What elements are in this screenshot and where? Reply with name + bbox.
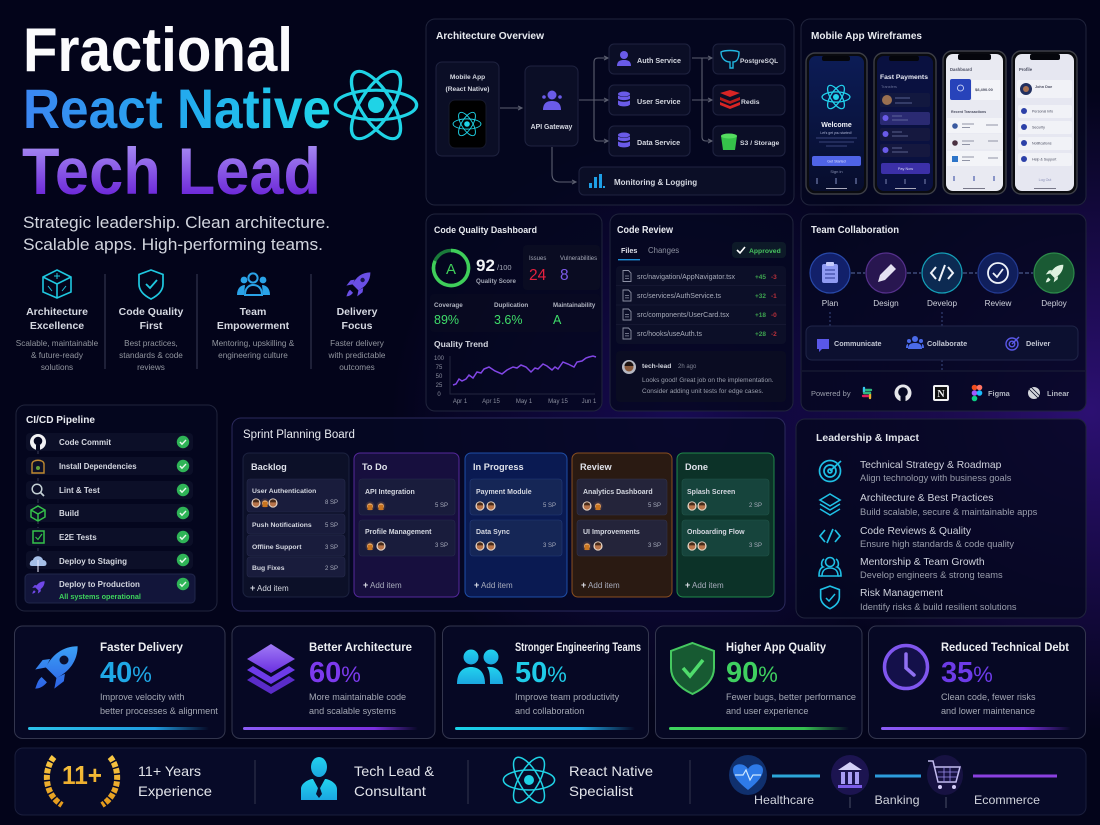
heading: code review: Code Review	[617, 225, 674, 236]
review comment: tech-lead	[642, 363, 671, 370]
pillar: team empowerment: engineering culture	[218, 351, 288, 360]
changed files list: src/navigation/AppNavigator.tsx	[637, 274, 736, 281]
column: in progress: Data Sync	[476, 529, 510, 536]
tech lead role: Consultant	[354, 783, 426, 799]
phone: profile screen: Personal Info	[1032, 110, 1053, 114]
issues and vulnerabilities: 8	[560, 267, 569, 284]
changed files list	[616, 266, 786, 344]
node: monitoring and logging: Monitoring & Logging	[614, 178, 697, 187]
collaboration strip	[806, 312, 1078, 371]
heading: code quality dashboard: Code Quality Dashboard	[434, 225, 537, 236]
column: in progress: Payment Module	[476, 489, 532, 496]
changed files list: +32	[755, 293, 766, 300]
line chart: quality trend: Jun 1	[582, 399, 597, 405]
pillar: code quality first: standards & code	[119, 351, 183, 360]
approved badge	[732, 242, 786, 258]
line chart: quality trend: 25	[436, 383, 443, 389]
heading: quality trend: Quality Trend	[434, 339, 488, 349]
metric card: higher app quality: Fewer bugs, better performance	[726, 692, 856, 702]
step: design: Design	[873, 299, 899, 308]
column: review: + Add item	[581, 580, 620, 590]
column: backlog: Bug Fixes	[252, 565, 285, 572]
industry: healthcare	[729, 755, 814, 807]
step: deploy to production: All systems operational	[59, 592, 141, 601]
step: deploy	[1034, 253, 1074, 308]
metric card: higher app quality: 90%	[726, 657, 778, 689]
pillar: delivery focus: Faster delivery	[330, 339, 385, 348]
pillar: delivery focus: Focus	[342, 320, 373, 332]
column: in progress	[465, 453, 567, 597]
changed files list: -2	[771, 331, 777, 338]
bottom strip	[15, 748, 1086, 815]
line chart: quality trend: 0	[437, 392, 441, 398]
step: lint and test: Lint & Test	[59, 486, 100, 495]
pillar: architecture excellence: & future-ready	[31, 351, 84, 360]
step: install dependencies	[26, 457, 193, 475]
phone: profile screen: Notifications	[1032, 142, 1052, 146]
changed files list: -0	[771, 312, 777, 319]
metric card: higher app quality	[656, 626, 862, 738]
line chart: quality trend: 50	[436, 374, 443, 380]
metric card: better architecture: and scalable systems	[309, 706, 396, 716]
quality score ring: Quality Score	[476, 278, 516, 285]
node: postgresql	[713, 44, 785, 74]
column: to do: + Add item	[363, 580, 402, 590]
heading: ci/cd pipeline: CI/CD Pipeline	[26, 415, 95, 426]
node: api gateway: API Gateway	[531, 124, 573, 131]
changed files list: src/services/AuthService.ts	[637, 293, 722, 300]
phone: profile screen: Help & Support	[1032, 158, 1056, 162]
heading: leadership and impact: Leadership & Impact	[816, 432, 919, 444]
metric card: higher app quality: and user experience	[726, 706, 808, 716]
column: in progress: In Progress	[473, 462, 524, 472]
step: build	[26, 504, 193, 522]
powered by tools: Linear	[1047, 389, 1069, 398]
panel: architecture overview	[426, 19, 794, 205]
step: develop	[922, 253, 962, 308]
pillar: code quality first: reviews	[137, 363, 165, 372]
item: mentorship	[819, 557, 1003, 580]
issues and vulnerabilities: 24	[529, 267, 547, 284]
phone: fast payments screen: Transfers	[881, 85, 897, 89]
tagline	[23, 213, 330, 254]
pillar: code quality first: Code Quality	[119, 306, 184, 318]
changed files list: src/hooks/useAuth.ts	[637, 331, 702, 338]
heading: sprint planning board: Sprint Planning Board	[243, 429, 355, 441]
column: done: Done	[685, 462, 708, 472]
step: design	[866, 253, 906, 308]
metric card: faster delivery: better processes & alignment	[100, 706, 218, 716]
tagline: Strategic leadership. Clean architecture.	[23, 213, 330, 232]
icon: layers	[247, 644, 295, 694]
metrics row: Maintainability	[553, 302, 596, 309]
industries	[729, 755, 1057, 808]
tabs: Changes	[648, 246, 679, 255]
panel: sprint planning board	[232, 418, 785, 611]
node: mobile app: (React Native)	[446, 86, 489, 93]
column: review: Review	[580, 462, 613, 472]
pillar: delivery focus: Delivery	[337, 306, 378, 318]
experience badge	[47, 757, 212, 805]
icon: people	[457, 650, 503, 684]
step: build: Build	[59, 509, 79, 518]
step: code commit	[26, 433, 193, 451]
metric card: stronger engineering teams: and collaboration	[515, 706, 584, 716]
changed files list: +28	[755, 331, 766, 338]
node: s3 storage	[713, 126, 785, 156]
metric card: reduced technical debt: 35%	[941, 657, 993, 689]
pillar: architecture excellence: Architecture	[26, 306, 88, 318]
node: auth service: Auth Service	[637, 56, 681, 65]
item: code reviews: Ensure high standards & code quality	[860, 539, 1014, 549]
phone: fast payments screen: Fast Payments	[880, 74, 928, 81]
phone: welcome screen: Welcome	[821, 122, 852, 129]
step: review	[978, 253, 1018, 308]
metric card: faster delivery: Faster Delivery	[100, 641, 183, 654]
connectors	[500, 56, 712, 184]
column: backlog: Offline Support	[252, 544, 302, 551]
column: backlog	[243, 453, 349, 597]
industry: banking	[831, 755, 920, 807]
metric card: faster delivery: Improve velocity with	[100, 692, 184, 702]
icon: shield check	[671, 643, 714, 694]
pillar: delivery focus: outcomes	[339, 363, 375, 372]
column: in progress: 3 SP	[543, 543, 556, 549]
review comment: Looks good! Great job on the implementation.	[642, 377, 774, 384]
item: risk management: Identify risks & build resilient solutions	[860, 602, 1017, 612]
metrics row: 3.6%	[494, 313, 522, 327]
column: to do: To Do	[362, 462, 388, 472]
metric card: reduced technical debt: Reduced Technical Debt	[941, 641, 1069, 654]
node: data service: Data Service	[637, 138, 680, 147]
line chart: quality trend: May 1	[516, 399, 533, 405]
column: to do: API Integration	[365, 489, 415, 496]
step: lint and test	[26, 481, 193, 499]
metric card: reduced technical debt: and lower maintenance	[941, 706, 1035, 716]
icon: figma	[972, 385, 982, 401]
column: backlog: Backlog	[251, 462, 287, 472]
step: deploy to staging: Deploy to Staging	[59, 557, 127, 566]
changed files list: +45	[755, 274, 766, 281]
pillar: code quality first: Best practices,	[124, 339, 178, 348]
item: technical strategy: Align technology with business goals	[860, 473, 1012, 483]
quality score ring	[434, 250, 516, 286]
metrics row: A	[553, 313, 562, 327]
panel: code quality dashboard	[426, 214, 602, 411]
metric card: better architecture: Better Architecture	[309, 641, 412, 654]
line chart: quality trend	[434, 356, 597, 405]
panel: team collaboration	[801, 214, 1086, 411]
metric card: faster delivery	[14, 626, 225, 738]
pillar: team empowerment: Team	[240, 306, 266, 318]
step: deploy: Deploy	[1041, 299, 1068, 308]
issues and vulnerabilities: Issues	[529, 256, 546, 262]
column: backlog: User Authentication	[252, 488, 316, 495]
column: done: + Add item	[685, 580, 724, 590]
changed files list: -3	[771, 274, 777, 281]
pillar: architecture excellence: solutions	[41, 363, 73, 372]
experience badge: 11+	[62, 760, 102, 790]
react native specialist: Specialist	[569, 783, 633, 799]
column: review: UI Improvements	[583, 529, 640, 536]
approved badge: Approved	[749, 248, 781, 255]
phone: profile screen: Log Out	[1039, 178, 1051, 182]
tabs: Files	[621, 246, 637, 255]
pillar: team empowerment: Mentoring, upskilling &	[212, 339, 295, 348]
quality score ring: 92	[476, 256, 495, 275]
column: backlog: 8 SP	[325, 500, 338, 506]
step: code commit: Code Commit	[59, 438, 111, 447]
column: to do: 3 SP	[435, 543, 448, 549]
line chart: quality trend: Apr 1	[453, 399, 468, 405]
item: code reviews	[820, 526, 1014, 549]
column: backlog: 2 SP	[325, 566, 338, 572]
issues and vulnerabilities: Vulnerabilities	[560, 256, 597, 262]
powered by tools	[811, 384, 1069, 402]
item: architecture	[820, 493, 1038, 517]
tech lead role: Tech Lead &	[354, 763, 435, 779]
line chart: quality trend: 100	[434, 356, 445, 362]
step: plan: Plan	[822, 299, 839, 308]
pillar: delivery focus: with predictable	[328, 351, 386, 360]
review comment: Consider adding unit tests for edge cases.	[642, 388, 764, 395]
icon: notion	[933, 385, 949, 401]
node: auth service	[609, 44, 690, 74]
node: api gateway	[525, 66, 578, 146]
column: done: 3 SP	[749, 543, 762, 549]
item: risk management: Risk Management	[860, 588, 943, 599]
column: backlog: + Add item	[250, 583, 289, 593]
phone: fast payments screen: Pay Now	[898, 167, 913, 171]
phone: welcome screen: Let's get you started!	[820, 131, 852, 135]
collaboration strip: Communicate	[834, 339, 882, 348]
item: architecture: Build scalable, secure & maintainable apps	[860, 507, 1038, 517]
icon: github	[894, 384, 912, 402]
node: mobile app	[436, 62, 499, 156]
industry: ecommerce	[927, 755, 1040, 807]
step: deploy to production: Deploy to Production	[59, 580, 140, 589]
review comment	[616, 351, 786, 402]
icon: clock	[884, 646, 928, 688]
icon: react atom logo	[335, 65, 417, 145]
step: develop: Develop	[927, 299, 957, 308]
metrics row: Duplication	[494, 302, 528, 309]
panel: code review	[610, 214, 793, 411]
phone: dashboard screen: Recent Transactions	[951, 110, 986, 114]
column: review: Analytics Dashboard	[583, 489, 653, 496]
workflow steps	[810, 253, 1074, 308]
metric card: stronger engineering teams: Improve team productivity	[515, 692, 620, 702]
tagline: Scalable apps. High-performing teams.	[23, 235, 323, 254]
step: e2e tests: E2E Tests	[59, 533, 97, 542]
column: to do	[354, 453, 459, 597]
metric card: better architecture	[232, 626, 435, 738]
phone: profile screen: Profile	[1019, 67, 1033, 72]
phone: dashboard screen: Dashboard	[950, 67, 972, 72]
item: technical strategy: Technical Strategy & Roadmap	[860, 460, 1002, 471]
phone: dashboard screen: $8,490.00	[975, 87, 994, 92]
phone: profile screen	[1012, 51, 1077, 194]
column: done: Onboarding Flow	[687, 529, 745, 536]
item: technical strategy	[820, 460, 1012, 483]
issues and vulnerabilities	[523, 245, 600, 290]
industry: banking: Banking	[874, 793, 920, 807]
item: architecture: Architecture & Best Practices	[860, 493, 993, 504]
node: mobile app: Mobile App	[450, 74, 485, 81]
powered by tools: Figma	[988, 389, 1011, 398]
item: risk management	[821, 586, 1017, 612]
changed files list: src/components/UserCard.tsx	[637, 312, 730, 319]
step: e2e tests	[26, 528, 193, 546]
pillar: architecture excellence: Scalable, maintainable	[16, 339, 99, 348]
title: Fractional	[23, 16, 293, 85]
column: in progress: 5 SP	[543, 503, 556, 509]
column: to do: 5 SP	[435, 503, 448, 509]
column: review	[572, 453, 672, 597]
collaboration strip: Deliver	[1026, 339, 1050, 348]
column: in progress: + Add item	[474, 580, 513, 590]
icon: rocket	[35, 646, 78, 689]
phone: welcome screen: Get Started	[827, 160, 846, 164]
quality score ring: A	[446, 261, 456, 278]
metrics row	[430, 294, 600, 332]
pillar: delivery focus	[328, 272, 386, 372]
experience badge: Experience	[138, 783, 212, 799]
node: postgresql: PostgreSQL	[740, 58, 778, 65]
powered by tools: Powered by	[811, 389, 851, 398]
industry: healthcare: Healthcare	[754, 793, 814, 807]
column: review: 5 SP	[648, 503, 661, 509]
changed files list: -1	[771, 293, 777, 300]
phone: dashboard screen	[943, 51, 1006, 194]
react native specialist	[503, 753, 653, 807]
title: React Native	[23, 77, 331, 140]
column: backlog: 5 SP	[325, 523, 338, 529]
tabs	[618, 246, 679, 260]
quality score ring: /100	[497, 263, 512, 272]
react native specialist: React Native	[569, 763, 653, 779]
icon: slack	[863, 388, 871, 398]
column: backlog: Push Notifications	[252, 522, 312, 529]
phone: profile screen: John Doe	[1035, 85, 1052, 89]
column: to do: Profile Management	[365, 529, 432, 536]
column: backlog: 3 SP	[325, 545, 338, 551]
changed files list: +18	[755, 312, 766, 319]
node: redis: Redis	[741, 99, 760, 106]
phone: welcome screen: Sign in	[830, 169, 843, 174]
metrics row: 89%	[434, 313, 459, 327]
tech lead role	[301, 757, 435, 800]
column: done: 2 SP	[749, 503, 762, 509]
icon: linear	[1028, 387, 1040, 399]
step: plan	[810, 253, 850, 308]
metric card: better architecture: More maintainable code	[309, 692, 406, 702]
step: install dependencies: Install Dependencies	[59, 462, 137, 471]
item: mentorship: Develop engineers & strong teams	[860, 570, 1003, 580]
node: data service	[609, 126, 690, 156]
metrics row: Coverage	[434, 302, 463, 309]
column: done	[677, 453, 774, 597]
pillar: team empowerment	[212, 273, 295, 360]
phone: fast payments screen	[874, 53, 936, 194]
metric card: stronger engineering teams: Stronger Engineering Teams	[515, 640, 641, 654]
line chart: quality trend: May 15	[548, 399, 568, 405]
node: user service: User Service	[637, 97, 681, 106]
pillar: architecture excellence	[16, 270, 99, 372]
item: mentorship: Mentorship & Team Growth	[860, 557, 985, 568]
metric card: faster delivery: 40%	[100, 657, 152, 689]
metric card: reduced technical debt: Clean code, fewer risks	[941, 692, 1036, 702]
step: deploy to production	[25, 574, 195, 603]
icon: notion: N	[937, 389, 945, 400]
item: code reviews: Code Reviews & Quality	[860, 526, 972, 537]
line chart: quality trend: Apr 15	[482, 399, 500, 405]
phone: profile screen: Security	[1032, 126, 1045, 130]
step: deploy to staging	[26, 551, 193, 572]
panel: leadership and impact	[796, 419, 1086, 618]
pillar: architecture excellence: Excellence	[30, 320, 84, 332]
node: monitoring and logging	[579, 167, 785, 195]
metric card: stronger engineering teams	[442, 626, 648, 738]
heading: architecture overview: Architecture Overview	[436, 31, 545, 42]
metric card: reduced technical debt	[868, 626, 1086, 738]
collaboration strip: Collaborate	[927, 339, 967, 348]
metric card: better architecture: 60%	[309, 657, 361, 689]
heading: mobile app wireframes: Mobile App Wireframes	[811, 31, 922, 42]
panel: ci/cd pipeline	[16, 405, 217, 611]
panel: mobile app wireframes	[801, 19, 1086, 205]
line chart: quality trend: 75	[436, 365, 443, 371]
pillar: team empowerment: Empowerment	[217, 320, 290, 332]
step: review: Review	[985, 299, 1012, 308]
column: done: Splash Screen	[687, 489, 735, 496]
node: s3 storage: S3 / Storage	[740, 140, 780, 147]
title: Tech Lead	[22, 134, 321, 208]
metric card: stronger engineering teams: 50%	[515, 657, 567, 689]
heading: team collaboration: Team Collaboration	[811, 225, 899, 236]
pillar: code quality first	[119, 270, 184, 372]
column: review: 3 SP	[648, 543, 661, 549]
experience badge: 11+ Years	[138, 763, 201, 779]
phone: welcome screen	[806, 53, 867, 194]
review comment: 2h ago	[678, 364, 697, 370]
feature pillars	[16, 270, 386, 372]
metric card: higher app quality: Higher App Quality	[726, 641, 826, 654]
title	[22, 16, 331, 208]
pillar: code quality first: First	[140, 320, 163, 332]
node: redis	[713, 85, 785, 115]
industry: ecommerce: Ecommerce	[974, 793, 1040, 807]
node: user service	[609, 85, 690, 115]
